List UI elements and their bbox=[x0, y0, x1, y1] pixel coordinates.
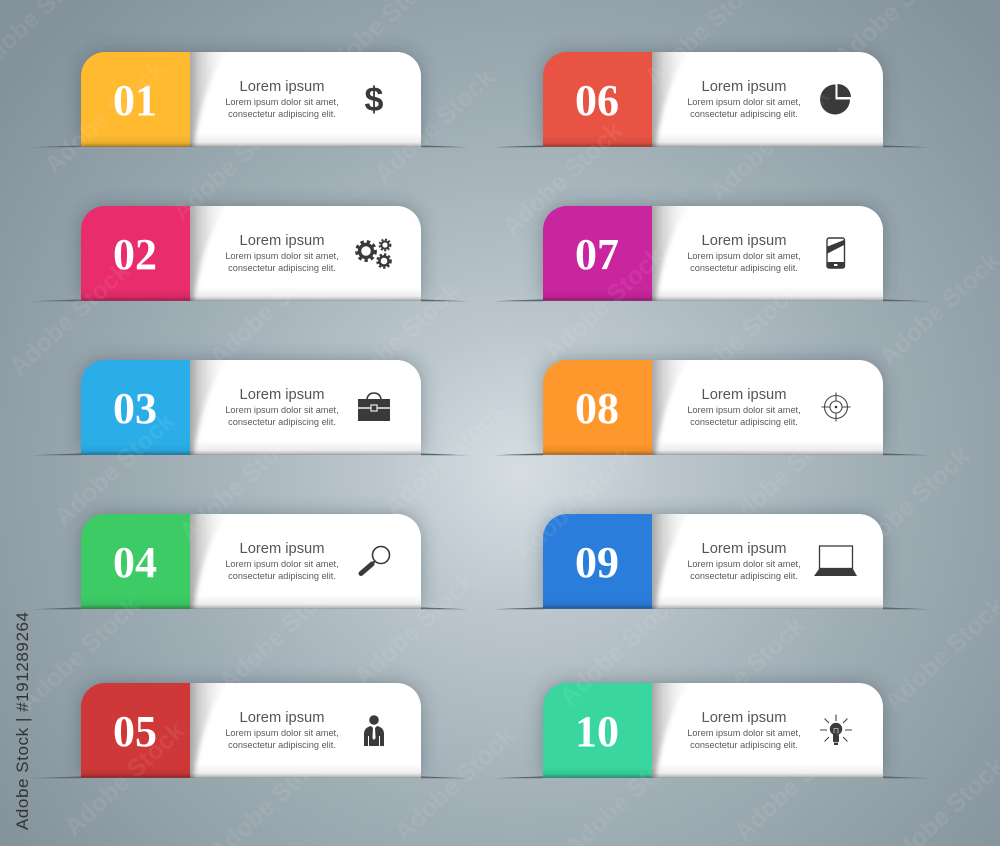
number tab 03: 03 bbox=[113, 384, 157, 433]
number tab 08: 08 bbox=[575, 384, 619, 433]
text: card 05: Lorem ipsum dolor sit amet, bbox=[225, 728, 339, 738]
watermarks: Adobe Stock bbox=[554, 587, 685, 711]
watermarks: Adobe Stock bbox=[59, 717, 190, 841]
text: card 09: Lorem ipsum bbox=[702, 541, 786, 557]
watermarks: Adobe Stock bbox=[214, 572, 345, 696]
card 04 bbox=[32, 508, 468, 612]
stock id label: Adobe Stock | #191289264 bbox=[13, 612, 32, 830]
text: card 03: Lorem ipsum dolor sit amet, bbox=[225, 405, 339, 415]
number tab 05 bbox=[81, 683, 190, 778]
number tab 09: 09 bbox=[575, 538, 619, 587]
text: card 02: Lorem ipsum bbox=[240, 233, 324, 249]
watermarks: Adobe Stock bbox=[334, 277, 465, 401]
number tab 06 bbox=[543, 52, 652, 147]
watermarks: Adobe Stock bbox=[509, 442, 640, 566]
text: card 08 bbox=[687, 387, 801, 427]
number tab 06: 06 bbox=[575, 76, 619, 125]
text: card 05: Lorem ipsum bbox=[240, 710, 324, 726]
text: card 03: consectetur adipiscing elit. bbox=[228, 417, 336, 427]
number tab 02 bbox=[81, 206, 190, 301]
watermarks: Adobe Stock bbox=[729, 722, 860, 846]
watermarks: Adobe Stock bbox=[719, 412, 850, 536]
card 01 bbox=[32, 46, 468, 150]
text: card 02: consectetur adipiscing elit. bbox=[228, 263, 336, 273]
watermarks: Adobe Stock bbox=[14, 592, 145, 716]
number tab 03 bbox=[81, 360, 190, 455]
number tab 10: 10 bbox=[575, 707, 619, 756]
watermarks: Adobe Stock bbox=[349, 567, 480, 691]
text: card 06 bbox=[687, 79, 801, 119]
text: card 10: Lorem ipsum bbox=[702, 710, 786, 726]
number tab 05: 05 bbox=[113, 707, 157, 756]
text: card 03: Lorem ipsum bbox=[240, 387, 324, 403]
text: card 01: Lorem ipsum bbox=[240, 79, 324, 95]
icon: target bbox=[822, 392, 850, 422]
text: card 01: consectetur adipiscing elit. bbox=[228, 109, 336, 119]
icon: dollar: $ bbox=[365, 81, 384, 119]
icon: light bulb bbox=[820, 714, 852, 745]
watermarks: Adobe Stock bbox=[204, 247, 335, 371]
card 08 bbox=[494, 354, 930, 458]
text: card 07: Lorem ipsum bbox=[702, 233, 786, 249]
text: card 08: Lorem ipsum dolor sit amet, bbox=[687, 405, 801, 415]
text: card 02: Lorem ipsum dolor sit amet, bbox=[225, 251, 339, 261]
text: card 05 bbox=[225, 710, 339, 750]
text: card 10: consectetur adipiscing elit. bbox=[690, 740, 798, 750]
number tab 01: 01 bbox=[113, 76, 157, 125]
icon: briefcase bbox=[358, 393, 390, 421]
card 06 bbox=[494, 46, 930, 150]
text: card 05: consectetur adipiscing elit. bbox=[228, 740, 336, 750]
icon: pie chart bbox=[820, 84, 851, 114]
text: card 10 bbox=[687, 710, 801, 750]
number tab 07: 07 bbox=[575, 230, 619, 279]
number tab 07 bbox=[543, 206, 652, 301]
text: card 03 bbox=[225, 387, 339, 427]
icon: person bbox=[364, 715, 384, 746]
text: card 07: Lorem ipsum dolor sit amet, bbox=[687, 251, 801, 261]
number tab 08 bbox=[543, 360, 652, 455]
text: card 04 bbox=[225, 541, 339, 581]
number tab 04 bbox=[81, 514, 190, 609]
number tab 04: 04 bbox=[113, 538, 157, 587]
text: card 08: consectetur adipiscing elit. bbox=[690, 417, 798, 427]
text: card 07: consectetur adipiscing elit. bbox=[690, 263, 798, 273]
card 07 bbox=[494, 200, 930, 304]
text: card 04: Lorem ipsum bbox=[240, 541, 324, 557]
text: card 02 bbox=[225, 233, 339, 273]
watermarks: Adobe Stock bbox=[704, 82, 835, 206]
watermarks: Adobe Stock bbox=[379, 397, 510, 521]
text: card 01: Lorem ipsum dolor sit amet, bbox=[225, 97, 339, 107]
icon: laptop bbox=[814, 546, 857, 576]
text: card 10: Lorem ipsum dolor sit amet, bbox=[687, 728, 801, 738]
icon: magnifier bbox=[361, 546, 390, 574]
text: card 06: Lorem ipsum dolor sit amet, bbox=[687, 97, 801, 107]
number tab 10 bbox=[543, 683, 652, 778]
number tab 02: 02 bbox=[113, 230, 157, 279]
watermarks: Adobe Stock bbox=[497, 117, 628, 241]
watermarks: Adobe Stock bbox=[674, 277, 805, 401]
text: card 04: Lorem ipsum dolor sit amet, bbox=[225, 559, 339, 569]
text: card 08: Lorem ipsum bbox=[702, 387, 786, 403]
text: card 04: consectetur adipiscing elit. bbox=[228, 571, 336, 581]
card 09 bbox=[494, 508, 930, 612]
text: card 06: consectetur adipiscing elit. bbox=[690, 109, 798, 119]
icon: smartphone bbox=[827, 238, 844, 268]
text: card 07 bbox=[687, 233, 801, 273]
watermarks: Adobe Stock bbox=[369, 64, 500, 188]
text: card 09: consectetur adipiscing elit. bbox=[690, 571, 798, 581]
watermarks: Adobe Stock bbox=[39, 55, 170, 179]
watermarks: Adobe Stock bbox=[539, 242, 670, 366]
text: card 09 bbox=[687, 541, 801, 581]
text: card 09: Lorem ipsum dolor sit amet, bbox=[687, 559, 801, 569]
watermarks: Adobe Stock bbox=[844, 442, 975, 566]
card 02 bbox=[32, 200, 468, 304]
text: card 06: Lorem ipsum bbox=[702, 79, 786, 95]
watermarks: Adobe Stock bbox=[4, 257, 135, 381]
watermarks: Adobe Stock bbox=[174, 422, 305, 546]
watermarks: Adobe Stock bbox=[49, 407, 180, 531]
card 03 bbox=[32, 354, 468, 458]
watermarks: Adobe Stock bbox=[679, 612, 810, 736]
card 05 bbox=[32, 677, 468, 781]
watermarks: Adobe Stock bbox=[167, 102, 298, 226]
watermarks: Adobe Stock bbox=[389, 722, 520, 846]
number tab 09 bbox=[543, 514, 652, 609]
card 10 bbox=[494, 677, 930, 781]
number tab 01 bbox=[81, 52, 190, 147]
text: card 01 bbox=[225, 79, 339, 119]
icon: gears bbox=[357, 240, 391, 268]
